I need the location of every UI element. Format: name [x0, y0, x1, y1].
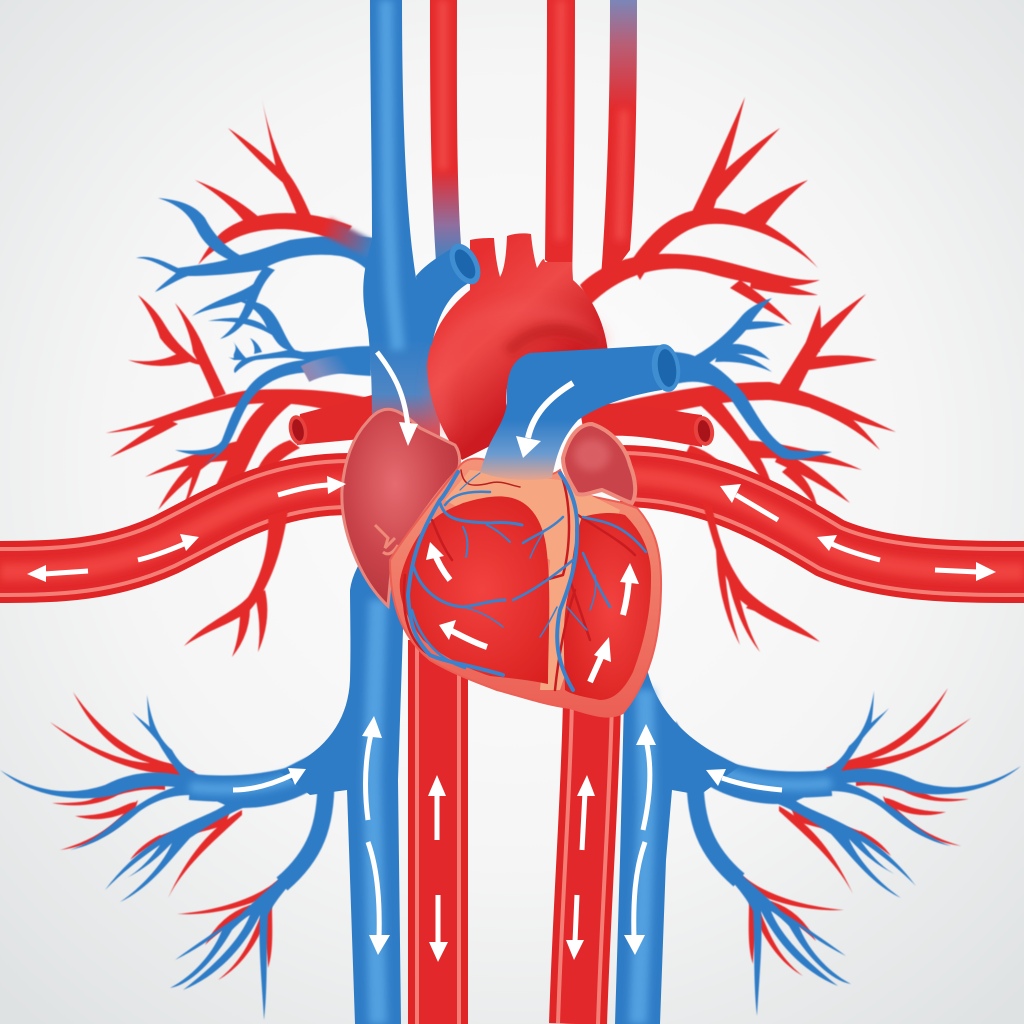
- top centre red vessel: [545, 0, 575, 280]
- central descending arteries: [438, 640, 592, 1024]
- upper right red arterial branches: [580, 97, 896, 510]
- superior vena cava: [363, 0, 440, 440]
- atrium small vessels: [375, 525, 398, 554]
- right chamber: [564, 513, 651, 700]
- aortic arch shade: [438, 310, 600, 430]
- blue right coronary: [513, 473, 646, 690]
- lower right vein and branches mirrored: [676, 688, 1021, 1016]
- thick main branch: [190, 752, 345, 788]
- aorta: [427, 233, 608, 460]
- right trunk highlight: [638, 690, 647, 1024]
- top vessels: [363, 0, 637, 440]
- pulmonary trunk: [480, 342, 683, 480]
- red twigs: [50, 692, 285, 980]
- right central artery: [578, 700, 592, 1024]
- left chamber: [400, 496, 549, 684]
- top right vessel: [600, 0, 637, 290]
- left trunk highlight: [372, 600, 378, 1024]
- ventricles outer wall: [390, 459, 661, 717]
- left horizontal artery: [0, 484, 350, 572]
- inner arch dark: [508, 330, 598, 352]
- thick downward branch: [282, 780, 326, 884]
- upper left red arterial branches: [106, 99, 369, 510]
- red coronaries: [404, 470, 635, 690]
- red vessel highlights: [443, 0, 624, 240]
- right horizontal artery: [620, 476, 1024, 572]
- right vein trunk: [615, 660, 740, 1024]
- blue stub upper: [416, 238, 487, 345]
- blue branches: [0, 695, 345, 1020]
- lower left red branches from artery: [184, 510, 288, 657]
- upper right blue branches: [672, 298, 832, 460]
- left atrial appendage: [563, 424, 635, 503]
- blue left coronary: [408, 472, 522, 675]
- branch highlight: [190, 756, 335, 789]
- vena cava highlight: [386, 0, 398, 350]
- left central artery: [408, 640, 468, 1024]
- peach septum: [445, 470, 620, 690]
- junction fades upper left: [305, 226, 372, 374]
- lower right red branches from artery: [702, 500, 820, 652]
- lower left vein and branches: [0, 692, 345, 1020]
- upper left blue venous branches: [136, 198, 375, 465]
- right red stub vessel: [580, 404, 716, 448]
- coronary vessels: [404, 470, 646, 690]
- right atrium: [342, 409, 460, 606]
- top left red vessel: [430, 0, 461, 262]
- red stub vessel left: [286, 395, 372, 447]
- left vein trunk: [280, 545, 405, 1024]
- white flow arrows: [27, 352, 996, 962]
- appendage highlight: [574, 439, 610, 471]
